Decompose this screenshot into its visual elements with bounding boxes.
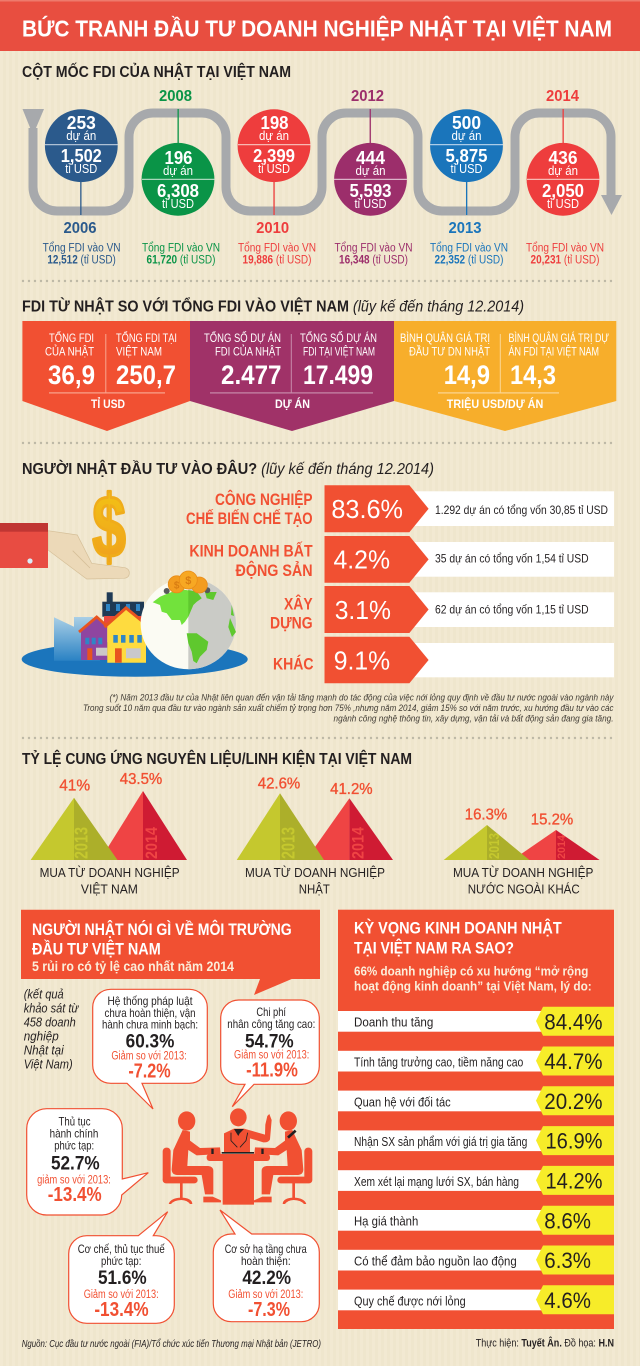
icon: hand holding dollar: $: [92, 477, 126, 576]
milestone 2013: tỉ USD: [450, 162, 482, 176]
chart: buy from other foreign firms: 15.2%: [531, 812, 573, 829]
callout: legal system: [93, 989, 207, 1109]
sector rows: [186, 485, 614, 683]
reason: cost reduction: [338, 1206, 614, 1235]
milestone 2013: 2013: [448, 220, 482, 237]
reason: partner relations: Quan hệ với đối tác: [354, 1094, 451, 1109]
right person and chair: [254, 1111, 312, 1204]
panel: number of projects: 2.477: [221, 360, 282, 390]
callout: tax procedures: Giảm so với 2013:: [84, 1289, 159, 1301]
credits: Thực hiện: Tuyết Ân. Đồ họa: H.N: [476, 1337, 614, 1350]
reason: revenue growth: Doanh thu tăng: [354, 1015, 433, 1030]
callout: administrative procedures: phức tạp:: [54, 1138, 94, 1152]
chart: buy from Japanese firms: 42.6%: [258, 775, 300, 792]
milestone 2012: 2012: [351, 88, 384, 105]
milestone 2014: Tổng FDI vào VN: [526, 242, 604, 254]
icon: people meeting at table: [163, 1108, 312, 1205]
milestone 2013: 5,875: [446, 145, 488, 166]
chart: buy from other foreign firms: 16.3%: [465, 806, 507, 823]
title banner: [0, 0, 640, 51]
milestone 2008: [142, 88, 220, 266]
row: construction 3.1%: 62 dự án có tổng vốn 1,15 tỉ USD: [435, 603, 589, 617]
icon: globe with coins: [141, 571, 236, 669]
callout: legal system: -7.2%: [128, 1061, 171, 1083]
heading: FDI milestones: CỘT MỐC FDI CỦA NHẬT TẠI VIỆT NAM: [22, 63, 291, 81]
milestone 2014: tỉ USD: [547, 197, 579, 211]
row: construction 3.1%: 3.1%: [335, 597, 391, 625]
row: real estate 4.2%: ĐỘNG SẢN: [236, 561, 313, 580]
row: real estate 4.2%: 35 dự án có tổng vốn 1,54 tỉ USD: [435, 552, 589, 566]
panel: average project value: [394, 321, 616, 431]
panel: average project value: ĐẦU TƯ DN NHẬT: [409, 346, 490, 359]
milestone 2013: dự án: [452, 129, 482, 143]
footnote: [83, 693, 615, 724]
reason: relaxed regulation: Quy chế được nới lỏng: [354, 1293, 466, 1308]
reason: partner relations: 20.2%: [544, 1089, 603, 1114]
panel: number of projects: [190, 321, 394, 431]
callout: infrastructure: Giảm so với 2013:: [228, 1289, 303, 1301]
chart: buy from Japanese firms: 2013: [279, 827, 299, 859]
panel: number of projects: 17.499: [303, 360, 373, 390]
row: other 9.1%: [273, 637, 614, 683]
timeline: winding arrow with milestones: [22, 88, 622, 266]
reason: cost reduction: Hạ giá thành: [354, 1214, 418, 1229]
callout: infrastructure: [213, 1210, 319, 1322]
panel: number of projects: TỔNG SỐ DỰ ÁN: [300, 331, 377, 345]
milestone 2006: 2006: [64, 220, 97, 237]
milestone 2006: 12,512 (tỉ USD): [47, 254, 116, 266]
chart: buy from other foreign firms: [444, 806, 600, 896]
row: real estate 4.2%: [189, 536, 614, 583]
callout: labour cost: -11.9%: [246, 1059, 298, 1081]
panel: total FDI in billion USD: TỈ USD: [91, 396, 125, 411]
milestone 2006: dự án: [66, 129, 96, 143]
milestone 2008: 61,720 (tỉ USD): [146, 254, 216, 266]
callout: administrative procedures: -13.4%: [48, 1184, 102, 1206]
row: manufacturing 83.6%: CÔNG NGHIỆP: [215, 490, 313, 509]
callout: administrative procedures: giảm so với 2013:: [37, 1174, 111, 1186]
chart: buy from Vietnamese firms: 43.5%: [120, 771, 162, 788]
reason: cost reduction: 8.6%: [544, 1208, 591, 1233]
reason: value-added production: Nhận SX sản phẩm với giá trị gia tăng: [354, 1134, 527, 1149]
milestone 2010: 198: [260, 112, 288, 133]
callout: infrastructure: hoàn thiện:: [241, 1254, 291, 1268]
milestone 2010: 2010: [256, 220, 289, 237]
icon: city and houses: [54, 592, 146, 663]
illustration: hand, dollar, houses and globe: [0, 477, 248, 677]
reason: labour supply: Có thể đảm bảo nguồn lao động: [354, 1254, 517, 1268]
callout: tax procedures: -13.4%: [94, 1299, 149, 1321]
chart: buy from other foreign firms: NƯỚC NGOÀI KHÁC: [468, 881, 580, 896]
chart: buy from Japanese firms: 41.2%: [330, 781, 373, 798]
panel: average project value: BÌNH QUÂN GIÁ TRỊ DỰ: [508, 332, 609, 345]
panel: total FDI in billion USD: [22, 321, 190, 431]
note: survey sample: khảo sát từ: [24, 1002, 79, 1016]
source note: Nguồn: Cục đầu tư nước ngoài (FIA)/Tổ chức xúc tiến Thương mại Nhật bản (JETRO): [22, 1338, 321, 1350]
chart: buy from Japanese firms: MUA TỪ DOANH NGHIỆP: [245, 865, 385, 880]
panel: business expectations: 66% doanh nghiệp có xu hướng “mở rộng: [354, 963, 588, 978]
panel: number of projects: FDI CỦA NHẬT: [215, 346, 281, 359]
panel: total FDI in billion USD: 36,9: [48, 360, 95, 390]
row: other 9.1%: KHÁC: [273, 654, 314, 673]
milestone 2006: 253: [67, 112, 96, 133]
milestone 2010: 2,399: [253, 145, 295, 166]
callout: infrastructure: -7.3%: [248, 1299, 290, 1321]
reason: value-added production: [338, 1126, 614, 1155]
note: survey sample: Việt Nam): [24, 1058, 73, 1072]
callout: legal system: hành chưa minh bạch:: [102, 1017, 198, 1031]
callout: infrastructure: 42.2%: [242, 1268, 291, 1289]
milestone 2010: 19,886 (tỉ USD): [242, 254, 312, 266]
heading: supply ratio: TỶ LỆ CUNG ỨNG NGUYÊN LIỆU/LINH KIỆN TẠI VIỆT NAM: [22, 750, 412, 768]
panel: total FDI in billion USD: CỦA NHẬT: [45, 346, 94, 359]
row: other 9.1%: 9.1%: [334, 647, 390, 675]
callout: legal system: chưa hoàn thiện, vận: [104, 1006, 196, 1020]
chart: buy from Japanese firms: 2014: [348, 827, 367, 859]
reason: revenue growth: [338, 1007, 614, 1036]
chart: buy from Vietnamese firms: 41%: [59, 778, 90, 795]
row: real estate 4.2%: 4.2%: [334, 547, 390, 575]
panel: number of projects: DỰ ÁN: [275, 396, 310, 411]
callout: tax procedures: phức tạp:: [101, 1254, 141, 1268]
milestone 2013: Tổng FDI vào VN: [430, 242, 508, 254]
reason: relaxed regulation: 4.6%: [544, 1288, 591, 1313]
reason: review production network: Xem xét lại mạng lưới SX, bán hàng: [354, 1174, 519, 1189]
table: [207, 1154, 270, 1161]
chart: buy from Vietnamese firms: MUA TỪ DOANH NGHIỆP: [40, 865, 180, 880]
reason: growth potential: [338, 1046, 614, 1076]
panel: Japanese views on investment climate: [21, 910, 320, 995]
milestone 2014: 2,050: [542, 180, 584, 201]
note: survey sample: 458 doanh: [24, 1016, 76, 1030]
icon: blue ground: [22, 642, 248, 677]
reason: value-added production: 16.9%: [546, 1129, 602, 1154]
callout: legal system: Hệ thống pháp luật: [108, 994, 193, 1008]
callout: labour cost: [221, 1000, 319, 1107]
panel: average project value: ÁN FDI TẠI VIỆT NAM: [508, 346, 599, 359]
heading: FDI comparison: FDI TỪ NHẬT SO VỚI TỔNG FDI VÀO VIỆT NAM (lũy kế đến tháng 12.2014): [22, 298, 524, 316]
milestone 2006: 1,502: [61, 145, 102, 166]
panel: average project value: 14,3: [510, 360, 556, 390]
milestone 2010: [238, 109, 316, 267]
reason: growth potential: 44.7%: [544, 1049, 603, 1074]
panel: business expectations: TẠI VIỆT NAM RA SAO?: [354, 938, 514, 957]
milestone 2008: 2008: [159, 88, 192, 105]
milestone 2006: tỉ USD: [65, 162, 97, 176]
chart: buy from other foreign firms: 2013: [486, 833, 503, 859]
milestone 2013: 500: [452, 112, 481, 133]
left person and chair: [163, 1111, 221, 1204]
milestone 2014: dự án: [548, 164, 578, 178]
panel: total FDI in billion USD: TỔNG FDI TẠI: [116, 332, 177, 345]
panel: total FDI in billion USD: VIỆT NAM: [116, 346, 162, 359]
callout: administrative procedures: hành chính: [50, 1127, 98, 1141]
callout: labour cost: 54.7%: [245, 1031, 294, 1052]
reason: labour supply: 6.3%: [544, 1248, 591, 1273]
callout: administrative procedures: [27, 1109, 148, 1215]
panel: Japanese views on investment climate: NGƯỜI NHẬT NÓI GÌ VỀ MÔI TRƯỜNG: [32, 920, 292, 939]
milestone 2013: [430, 109, 508, 267]
callout: legal system: Giảm so với 2013:: [111, 1050, 187, 1062]
milestone 2012: 5,593: [350, 180, 392, 201]
milestone 2012: 16,348 (tỉ USD): [339, 254, 408, 266]
milestone 2008: dự án: [163, 164, 193, 178]
reason: review production network: 14.2%: [546, 1168, 602, 1194]
milestone 2008: Tổng FDI vào VN: [142, 242, 220, 254]
chart: buy from other foreign firms: MUA TỪ DOANH NGHIỆP: [453, 865, 593, 880]
milestone 2012: Tổng FDI vào VN: [334, 242, 412, 254]
reason: relaxed regulation: [338, 1285, 614, 1314]
milestone 2010: dự án: [259, 129, 289, 143]
milestone 2014: 436: [548, 147, 578, 168]
note: survey sample: nghiệp: [24, 1030, 59, 1044]
milestone 2014: 2014: [546, 88, 579, 105]
callout: labour cost: Chi phí: [256, 1005, 287, 1019]
chart: buy from other foreign firms: 2014: [556, 834, 568, 859]
reason: partner relations: [338, 1086, 614, 1115]
callout: tax procedures: [69, 1212, 174, 1323]
row: construction 3.1%: DỰNG: [270, 615, 313, 633]
row: manufacturing 83.6%: [186, 485, 614, 532]
row: manufacturing 83.6%: 1.292 dự án có tổng vốn 30,85 tỉ USD: [435, 503, 608, 517]
chart: buy from Vietnamese firms: [31, 771, 187, 896]
centre person: [222, 1108, 272, 1154]
milestone 2014: 20,231 (tỉ USD): [530, 254, 600, 266]
milestone 2010: tỉ USD: [258, 162, 290, 176]
reason: labour supply: [338, 1246, 614, 1274]
heading: where Japanese invest: NGƯỜI NHẬT ĐẦU TƯ VÀO ĐÂU? (lũy kế đến tháng 12.2014): [22, 460, 434, 478]
milestone 2008: tỉ USD: [162, 197, 194, 211]
callout: tax procedures: Cơ chế, thủ tục thuế: [78, 1242, 165, 1256]
note: survey sample: Nhật tại: [24, 1044, 65, 1058]
chart: buy from Japanese firms: NHẬT: [299, 881, 330, 896]
chart: buy from Japanese firms: [237, 775, 393, 896]
note: survey sample: [24, 988, 79, 1072]
panel: total FDI in billion USD: TỔNG FDI: [49, 332, 94, 345]
callout: legal system: 60.3%: [126, 1031, 174, 1052]
row: construction 3.1%: XÂY: [284, 594, 313, 613]
panel: number of projects: TỔNG SỐ DỰ ÁN: [204, 331, 281, 345]
row: manufacturing 83.6%: 83.6%: [331, 496, 403, 524]
panel: business expectations: [338, 910, 614, 1329]
milestone 2008: 196: [164, 147, 192, 168]
row: manufacturing 83.6%: CHẾ BIẾN CHẾ TẠO: [186, 509, 313, 528]
milestone 2012: 444: [356, 147, 386, 168]
milestone 2010: Tổng FDI vào VN: [238, 242, 316, 254]
callout: labour cost: Giảm so với 2013:: [234, 1049, 309, 1061]
chart: buy from Vietnamese firms: VIỆT NAM: [81, 881, 138, 896]
callout: infrastructure: Cơ sở hạ tầng chưa: [225, 1242, 307, 1256]
milestone 2008: 6,308: [157, 180, 199, 201]
panel: average project value: 14,9: [444, 360, 490, 390]
callout: administrative procedures: Thủ tục: [58, 1115, 90, 1129]
row: construction 3.1%: [270, 586, 614, 633]
milestone 2014: [526, 88, 604, 266]
panel: business expectations: hoạt động kinh doanh” tại Việt Nam, lý do:: [354, 979, 592, 994]
panel: Japanese views on investment climate: 5 rủi ro có tỷ lệ cao nhất năm 2014: [32, 959, 234, 974]
note: survey sample: (kết quả: [24, 988, 64, 1002]
milestone 2012: tỉ USD: [354, 197, 386, 211]
callout: labour cost: nhân công tăng cao:: [227, 1017, 315, 1031]
panel: total FDI in billion USD: 250,7: [116, 360, 176, 390]
milestone 2006: Tổng FDI vào VN: [43, 242, 121, 254]
milestone 2012: dự án: [356, 164, 386, 178]
icon: hand holding dollar: [0, 477, 129, 579]
icon: globe with coins: $: [185, 575, 191, 587]
milestone 2013: 22,352 (tỉ USD): [434, 254, 504, 266]
panel: average project value: TRIỆU USD/DỰ ÁN: [447, 396, 543, 411]
panel: average project value: BÌNH QUÂN GIÁ TRỊ: [400, 332, 490, 345]
reason: revenue growth: 84.4%: [544, 1009, 603, 1034]
icon: globe with coins: $: [174, 580, 180, 592]
chart: buy from Vietnamese firms: 2014: [142, 827, 161, 859]
row: real estate 4.2%: KINH DOANH BẤT: [189, 542, 313, 561]
milestone 2012: [334, 88, 412, 266]
callout: tax procedures: 51.6%: [98, 1268, 147, 1289]
milestone 2006: [43, 109, 121, 267]
panel: business expectations: KỲ VỌNG KINH DOANH NHẬT: [354, 919, 562, 938]
chart: buy from Vietnamese firms: 2013: [72, 827, 92, 859]
reason: review production network: [338, 1166, 614, 1195]
panel: number of projects: FDI TẠI VIỆT NAM: [303, 346, 375, 359]
callout: administrative procedures: 52.7%: [51, 1154, 100, 1175]
reason: growth potential: Tính tăng trưởng cao, tiềm năng cao: [354, 1054, 523, 1070]
panel: Japanese views on investment climate: ĐẦU TƯ VIỆT NAM: [32, 939, 161, 958]
